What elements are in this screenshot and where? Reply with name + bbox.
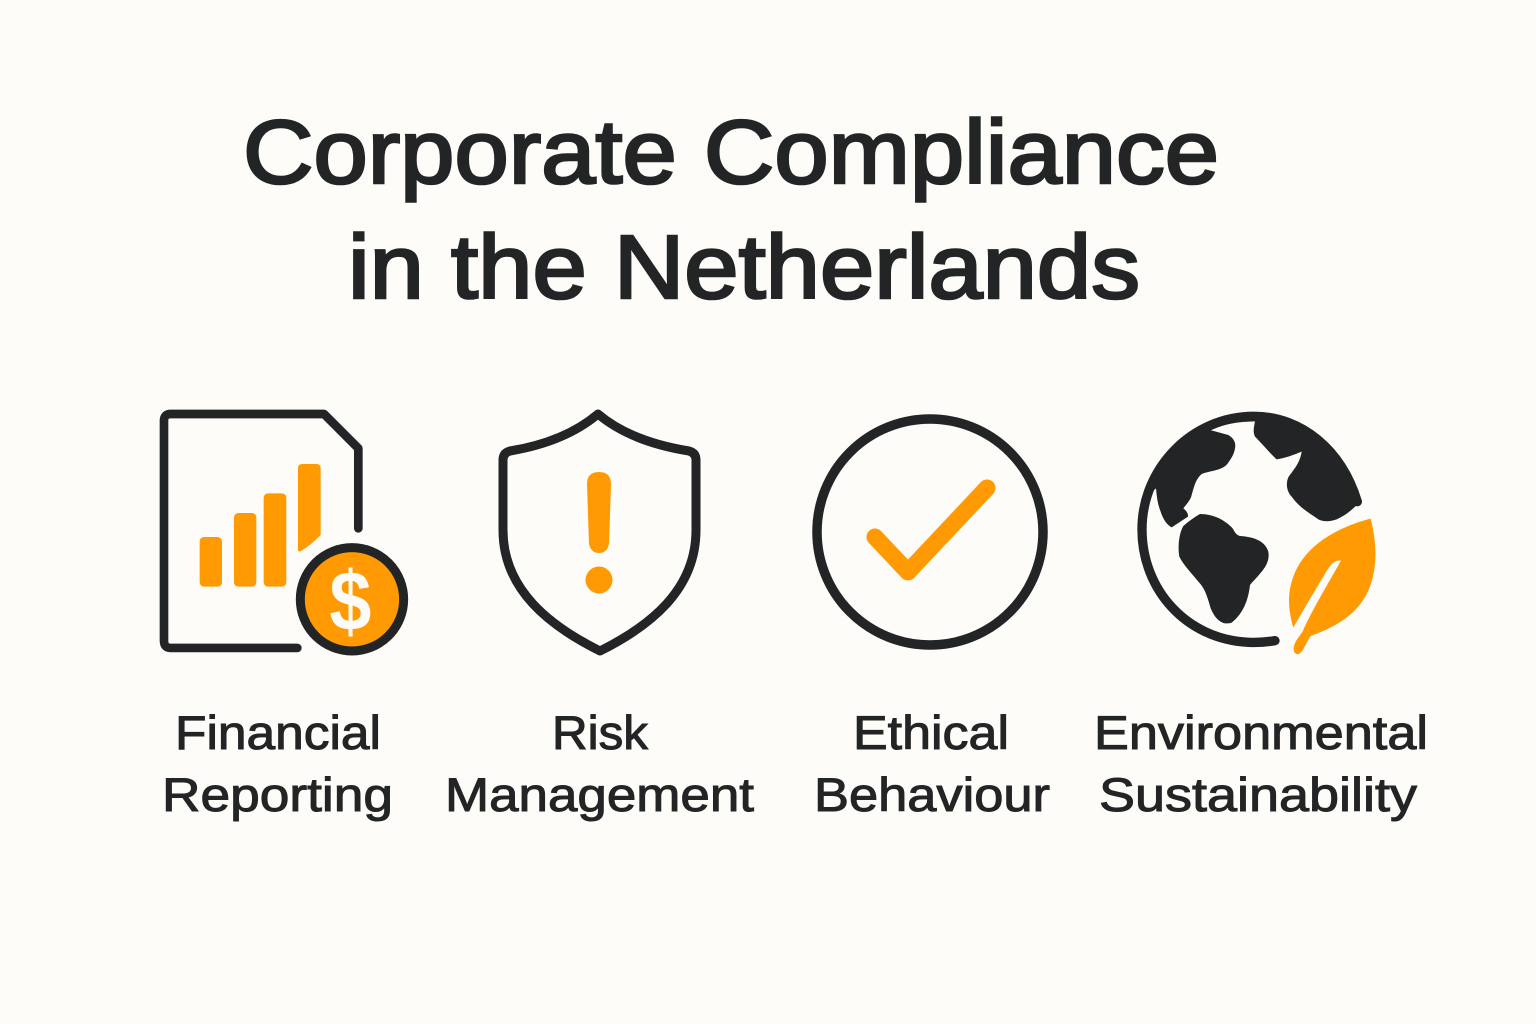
label: Financial Reporting (162, 706, 393, 821)
icon: globe with leaf (1142, 413, 1375, 654)
title: Corporate Compliance (243, 103, 1219, 203)
label: Risk Management: Management (445, 768, 754, 821)
label: Ethical Behaviour (814, 706, 1050, 821)
icon: shield with exclamation mark (503, 414, 696, 651)
label: Environmental Sustainability (1094, 706, 1428, 821)
icon: financial report with bar chart and dollar coin: $ (329, 553, 371, 648)
label: Financial Reporting: Financial (175, 706, 381, 759)
title (243, 103, 1219, 318)
icon: financial report with bar chart and dollar coin (164, 414, 404, 651)
label: Environmental Sustainability: Environmental (1094, 706, 1428, 759)
label: Risk Management (445, 706, 754, 821)
label: Ethical Behaviour: Behaviour (814, 768, 1050, 821)
title: in the Netherlands (348, 218, 1140, 318)
label: Risk Management: Risk (552, 706, 649, 759)
label: Environmental Sustainability: Sustainability (1099, 768, 1418, 821)
label: Ethical Behaviour: Ethical (853, 706, 1009, 759)
label: Financial Reporting: Reporting (162, 768, 393, 821)
icon: circle with check mark (817, 419, 1043, 645)
